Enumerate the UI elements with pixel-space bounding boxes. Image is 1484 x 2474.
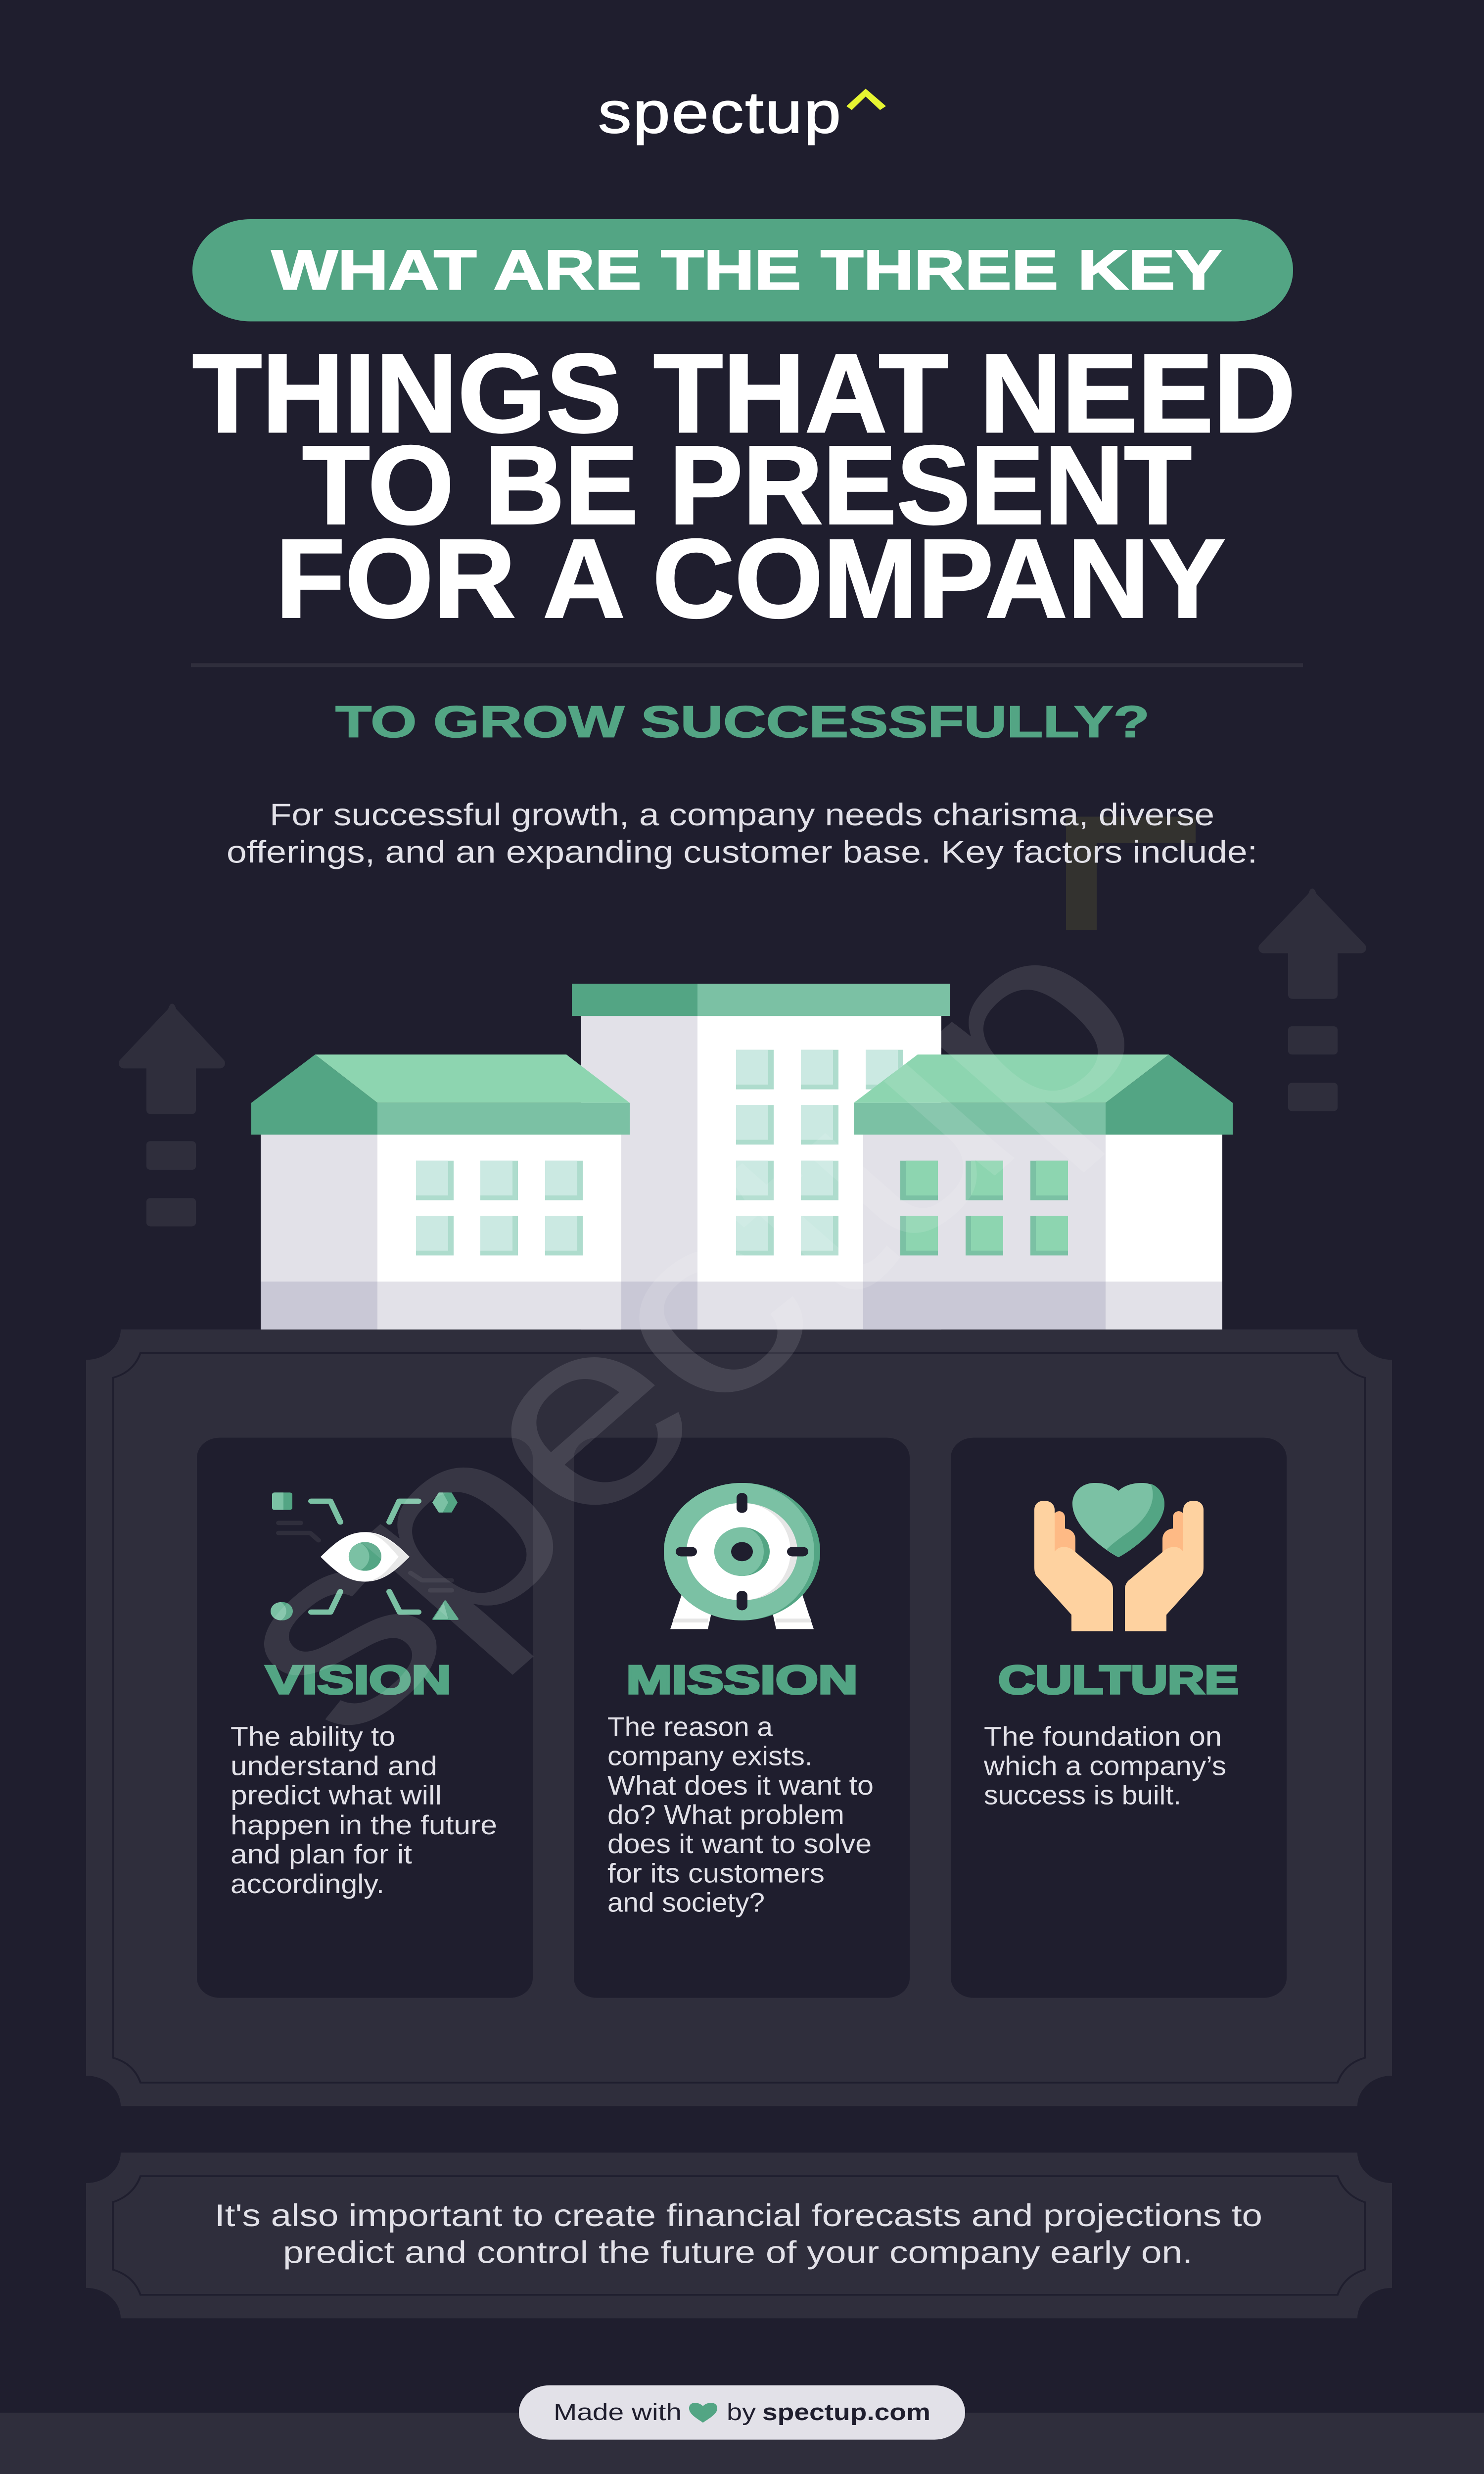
title pill: [192, 219, 1293, 321]
body: vision: happen in the future: [231, 1810, 497, 1840]
body: mission: does it want to solve: [607, 1829, 872, 1859]
left house: [251, 1054, 630, 1330]
main heading: TO BE PRESENT: [302, 423, 1192, 548]
footer pill: [519, 2385, 965, 2440]
body: mission: do? What problem: [607, 1800, 844, 1830]
intro paragraph: [227, 798, 1257, 870]
arrow left: [119, 1003, 225, 1226]
footer pill: Made with: [554, 2399, 682, 2425]
body: vision: and plan for it: [231, 1839, 412, 1869]
body: vision: understand and: [231, 1751, 437, 1781]
panel: key factors frame: [86, 1330, 1392, 2106]
heading: culture: CULTURE: [998, 1658, 1239, 1702]
logo: spectup: spectup: [598, 80, 841, 145]
card: culture: [951, 1438, 1287, 1998]
callout: financial forecasts: It's also important to create financial forecasts and projections to: [215, 2198, 1262, 2233]
heading: vision: VISION: [266, 1658, 451, 1702]
icon: eye: [271, 1492, 458, 1620]
building illustration: [251, 984, 1233, 1330]
icon: target: [664, 1483, 820, 1629]
body: culture: The foundation on: [984, 1721, 1222, 1752]
body: culture: success is built.: [984, 1780, 1181, 1810]
tower: [572, 984, 950, 1330]
body: mission: What does it want to: [607, 1771, 874, 1801]
card: vision: [197, 1438, 533, 1998]
card: mission: [574, 1438, 910, 1998]
watermark caret: [1066, 817, 1196, 930]
icon: heart in hands: [1034, 1483, 1204, 1631]
body: mission: company exists.: [607, 1741, 813, 1771]
body: mission: [607, 1712, 874, 1918]
main heading: FOR A COMPANY: [276, 517, 1225, 641]
body: vision: accordingly.: [231, 1869, 384, 1899]
body: culture: [983, 1721, 1226, 1810]
main heading: THINGS THAT NEED: [192, 331, 1296, 456]
subheading: TO GROW SUCCESSFULLY?: [335, 697, 1150, 747]
callout: financial forecasts: predict and control the future of your company early on.: [283, 2236, 1193, 2270]
callout: financial forecasts: [86, 2153, 1392, 2318]
intro paragraph: offerings, and an expanding customer base. Key factors include:: [227, 835, 1257, 870]
title pill: WHAT ARE THE THREE KEY: [272, 238, 1222, 301]
body: mission: for its customers: [607, 1858, 825, 1889]
heading: mission: MISSION: [626, 1658, 858, 1702]
intro paragraph: For successful growth, a company needs charisma, diverse: [270, 798, 1214, 832]
footer pill: spectup.com: [762, 2399, 930, 2425]
footer pill: by: [727, 2399, 756, 2425]
body: vision: [231, 1721, 497, 1899]
body: culture: which a company’s: [983, 1751, 1226, 1781]
body: mission: and society?: [607, 1888, 765, 1918]
body: vision: predict what will: [231, 1780, 442, 1810]
arrow right: [1258, 889, 1366, 1111]
right house: [854, 1054, 1233, 1330]
watermark: spectup: spectup: [157, 868, 1203, 1787]
body: mission: The reason a: [607, 1712, 773, 1742]
main heading: [192, 331, 1296, 641]
body: vision: The ability to: [231, 1721, 395, 1752]
footer band: [0, 2413, 1484, 2474]
